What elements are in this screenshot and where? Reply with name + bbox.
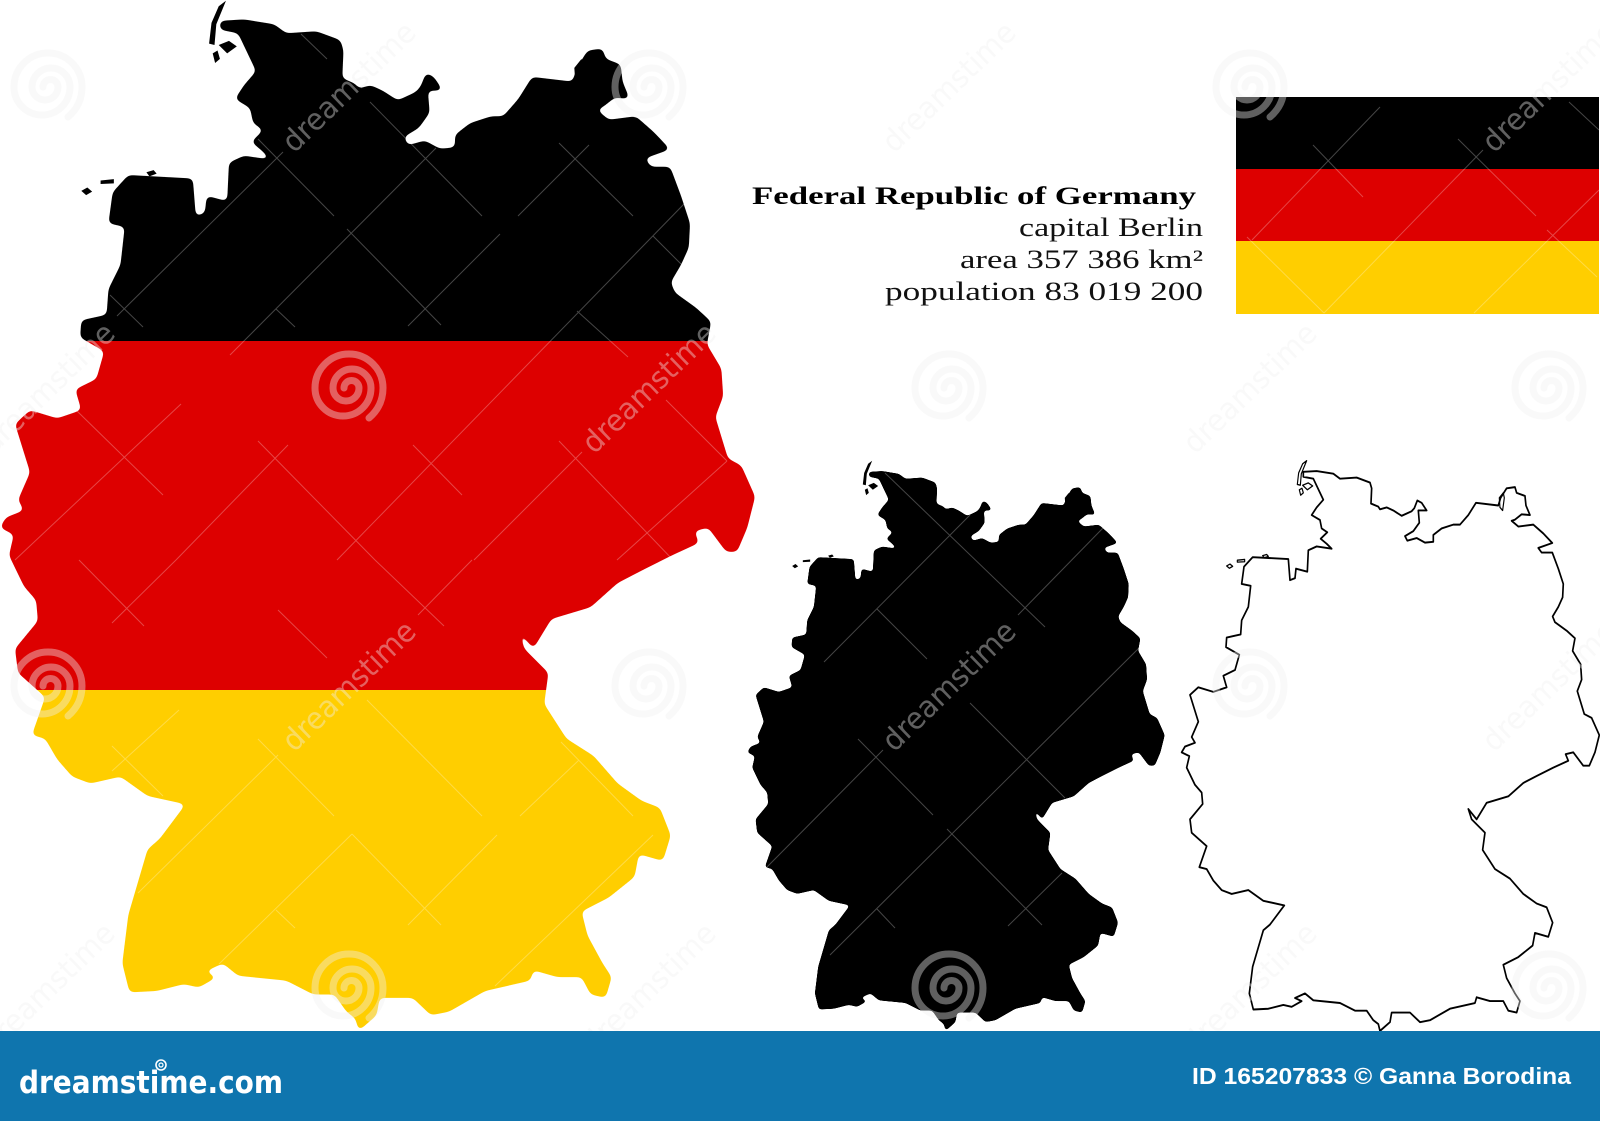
watermark wordmarks: dreamstime — [1176, 916, 1324, 1061]
area: area 357 386 km² — [960, 245, 1203, 274]
outline map — [1182, 461, 1599, 1031]
heading: Federal Republic of Germany — [752, 183, 1197, 210]
image credit: ID 165207833 © Ganna Borodina — [1192, 1063, 1571, 1089]
country facts text block — [752, 183, 1203, 306]
watermark wordmarks: dreamstime — [275, 15, 423, 160]
watermark wordmarks: dreamstime — [1176, 316, 1324, 461]
footer logo: dreamstime.com — [19, 1065, 283, 1101]
large map in flag colours — [0, 0, 800, 1035]
watermark wordmarks: dreamstime — [875, 15, 1023, 160]
watermark wordmarks: dreamstime — [875, 614, 1023, 759]
watermark wordmarks: dreamstime — [275, 614, 423, 759]
footer banner — [0, 1031, 1600, 1121]
watermark wordmarks: dreamstime — [575, 316, 723, 461]
flag of Germany — [1236, 97, 1599, 314]
capital: capital Berlin — [1019, 213, 1203, 242]
small black silhouette map — [747, 461, 1165, 1031]
population: population 83 019 200 — [885, 277, 1203, 306]
watermark wordmarks: dreamstime — [575, 916, 723, 1061]
